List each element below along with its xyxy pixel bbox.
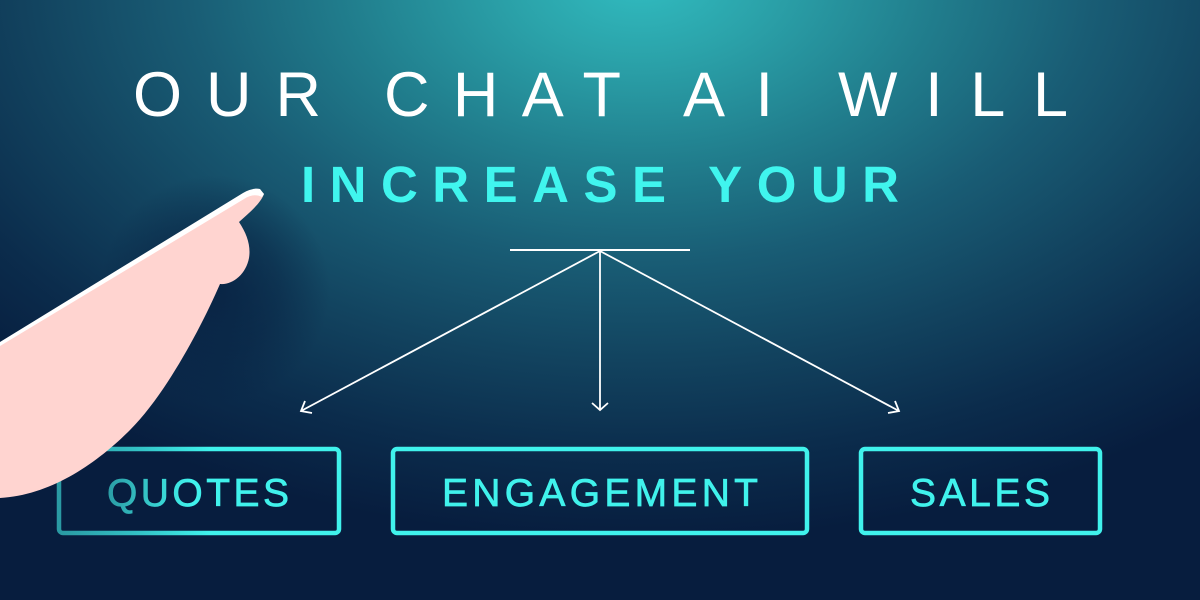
title xyxy=(133,60,1068,130)
box: sales xyxy=(861,449,1100,533)
label: quotes: QUOTES xyxy=(107,472,289,515)
label: engagement: ENGAGEMENT xyxy=(442,472,758,515)
icon: pointing hand xyxy=(0,189,264,498)
label: sales: SALES xyxy=(910,472,1050,515)
title: AI xyxy=(683,60,773,130)
subtitle: INCREASE YOUR xyxy=(301,156,899,213)
hand shadow xyxy=(100,175,330,405)
title: WILL xyxy=(838,60,1068,130)
hand shape xyxy=(0,190,264,498)
arrow: left xyxy=(301,251,600,413)
box: engagement xyxy=(393,449,807,533)
fingertip highlight xyxy=(0,189,264,346)
arrows: branching diagram xyxy=(301,250,899,413)
arrow: right xyxy=(600,251,899,413)
arrow: centre xyxy=(592,251,608,410)
title: CHAT xyxy=(384,60,621,130)
box: quotes xyxy=(59,449,339,533)
title: OUR xyxy=(133,60,321,130)
